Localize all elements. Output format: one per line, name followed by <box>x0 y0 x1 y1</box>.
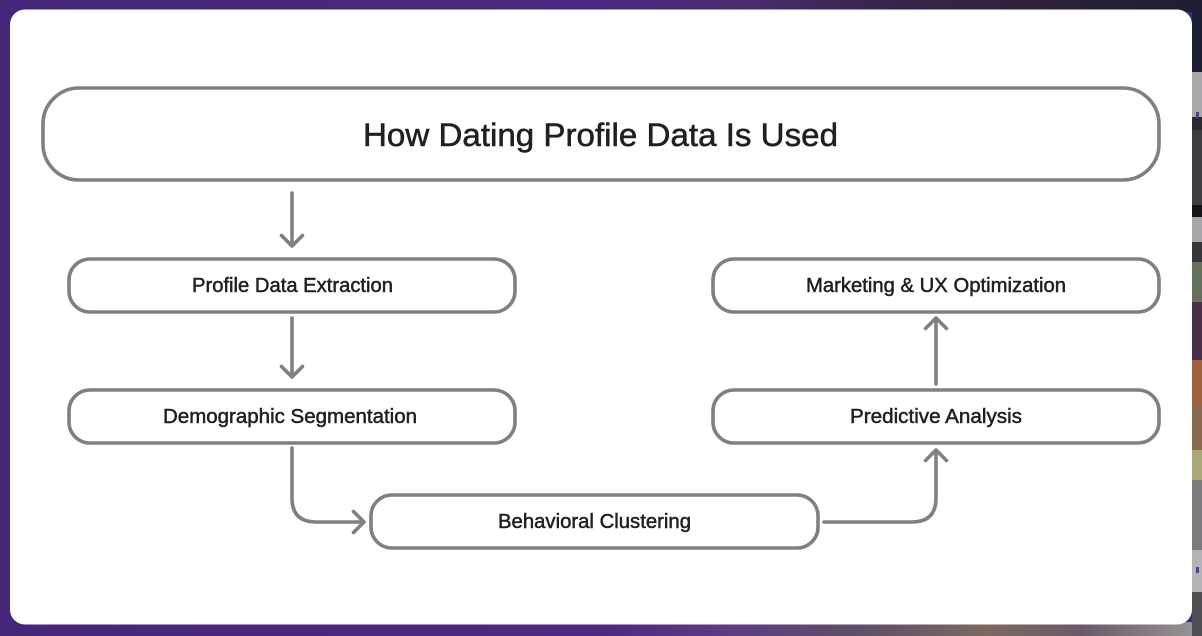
title box <box>43 88 1159 180</box>
step: Marketing & UX Optimization: Marketing & UX Optimization <box>806 275 1066 297</box>
title: How Dating Profile Data Is Used <box>363 117 838 153</box>
step: Profile Data Extraction <box>69 259 515 312</box>
step: Demographic Segmentation <box>69 390 515 443</box>
step: Profile Data Extraction: Profile Data Extraction <box>192 275 393 297</box>
arrow: predictive analysis to marketing <box>926 318 946 384</box>
arrow: extraction to segmentation <box>282 318 302 377</box>
step: Predictive Analysis: Predictive Analysis <box>850 406 1022 428</box>
step: Behavioral Clustering: Behavioral Clustering <box>498 511 691 533</box>
arrow: segmentation to clustering <box>292 448 364 532</box>
step: Predictive Analysis <box>713 390 1159 443</box>
arrow: title to profile data extraction <box>282 193 302 246</box>
arrow: clustering to predictive analysis <box>824 450 946 522</box>
step: Demographic Segmentation: Demographic Segmentation <box>163 406 417 428</box>
step: Behavioral Clustering <box>371 495 818 548</box>
step: Marketing & UX Optimization <box>713 259 1159 312</box>
